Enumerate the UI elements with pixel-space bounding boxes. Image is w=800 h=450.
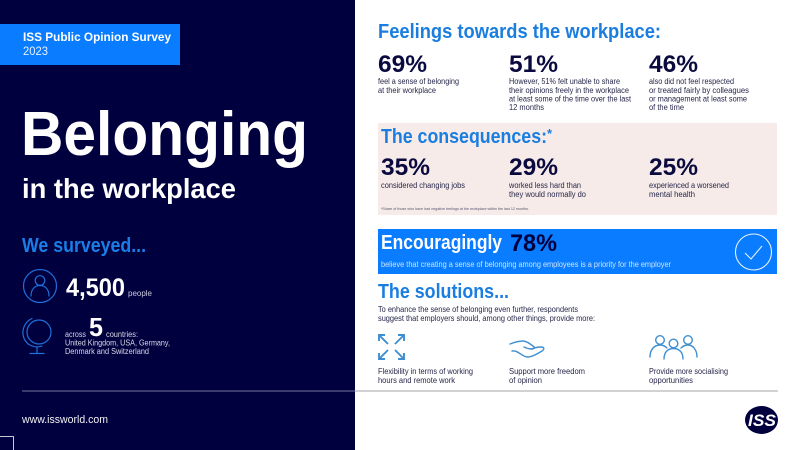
panel: consequences: * [547,126,553,141]
stat: 35%: considered changing jobs [381,181,465,190]
stat: 51%: 51% [509,51,558,78]
panel: encouragingly banner [378,229,777,274]
intro text: To enhance the sense of belonging even further, respondents [378,305,578,314]
stat: 51%: 12 months [509,103,544,112]
icon: arrows [379,335,404,359]
panel: encouragingly banner: believe that creating a sense of belonging among employees is a priority for the employer [381,260,671,269]
stat: 29%: they would normally do [509,190,587,199]
panel: encouragingly banner: Encouragingly [381,232,503,254]
stat: 51%: However, 51% felt unable to share [509,77,620,86]
stat: 25%: mental health [649,190,695,199]
solution: freedom: of opinion [509,376,542,385]
stat: countries: 5 [89,312,103,342]
survey tag: ISS Public Opinion Survey [23,30,171,44]
panel: encouragingly banner: 78% [510,230,557,257]
icon: people group [650,336,697,359]
panel: consequences [378,123,777,215]
stat: countries: across [65,330,86,339]
solution: freedom [509,367,585,385]
stat: 29% [508,154,587,199]
solution: flexibility: Flexibility in terms of working [378,367,473,376]
stat: 69%: feel a sense of belonging [378,77,459,86]
panel: solutions: The solutions... [378,281,509,303]
title: Belonging [21,100,308,169]
survey tag: 2023 [23,44,48,58]
stat: 46%: or management at least some [649,94,747,104]
logo: ISS: ISS [748,411,777,430]
stat: 69% [378,51,459,95]
solution: flexibility [378,367,473,385]
solution: socialising: opportunities [649,376,693,385]
logo: ISS [745,406,778,434]
panel: left navy [0,0,355,450]
stat: 46%: of the time [649,103,685,112]
stat: 46%: or treated fairly by colleagues [649,86,749,95]
solution: freedom: Support more freedom [509,367,585,376]
icon: globe [23,318,51,354]
stat: 69%: 69% [378,51,427,78]
panel: solutions [378,281,728,385]
panel: consequences: The consequences: [381,126,547,148]
stat: countries: United Kingdom, USA, Germany, [65,338,170,348]
stat: people: 4,500 [66,274,125,302]
survey tag [0,24,180,65]
stat: 46%: also did not feel respected [649,77,734,86]
intro text: suggest that employers should, among other things, provide more: [378,314,595,323]
panel: feelings: Feelings towards the workplace: [378,21,661,43]
stat: 25%: 25% [649,154,698,181]
stat: 51%: their opinions freely in the workplace [509,86,630,95]
panel: feelings [378,21,749,112]
stat: people: people [128,289,153,298]
stat: 46% [649,51,749,112]
stat: countries [65,312,170,356]
stat: 51%: at least some of the time over the last [509,94,632,104]
icon: open hand [510,341,544,357]
stat: countries: countries: [106,330,138,339]
icon: check [736,234,772,270]
stat: 46%: 46% [649,51,698,78]
stat: 29%: 29% [509,154,558,181]
icon: person [24,270,56,302]
stat: countries: Denmark and Switzerland [65,347,149,356]
stat: 25%: experienced a worsened [649,181,729,190]
stat: 35%: 35% [381,154,430,181]
solution: socialising: Provide more socialising [649,367,728,376]
stat: 25% [649,154,729,199]
stat: 35% [381,154,465,190]
stat: 51% [509,51,632,112]
title [21,100,308,204]
solution: socialising [649,367,728,385]
title: in the workplace [22,173,236,204]
website: www.issworld.com [21,414,108,426]
stat: 29%: worked less hard than [508,181,581,190]
stat: 69%: at their workplace [378,86,437,95]
footnote: *Share of those who have had negative feelings at the workplace within the last 12 months. [381,206,529,211]
intro text [378,305,595,323]
solution: flexibility: hours and remote work [378,376,456,385]
heading: we surveyed: We surveyed... [22,235,146,257]
